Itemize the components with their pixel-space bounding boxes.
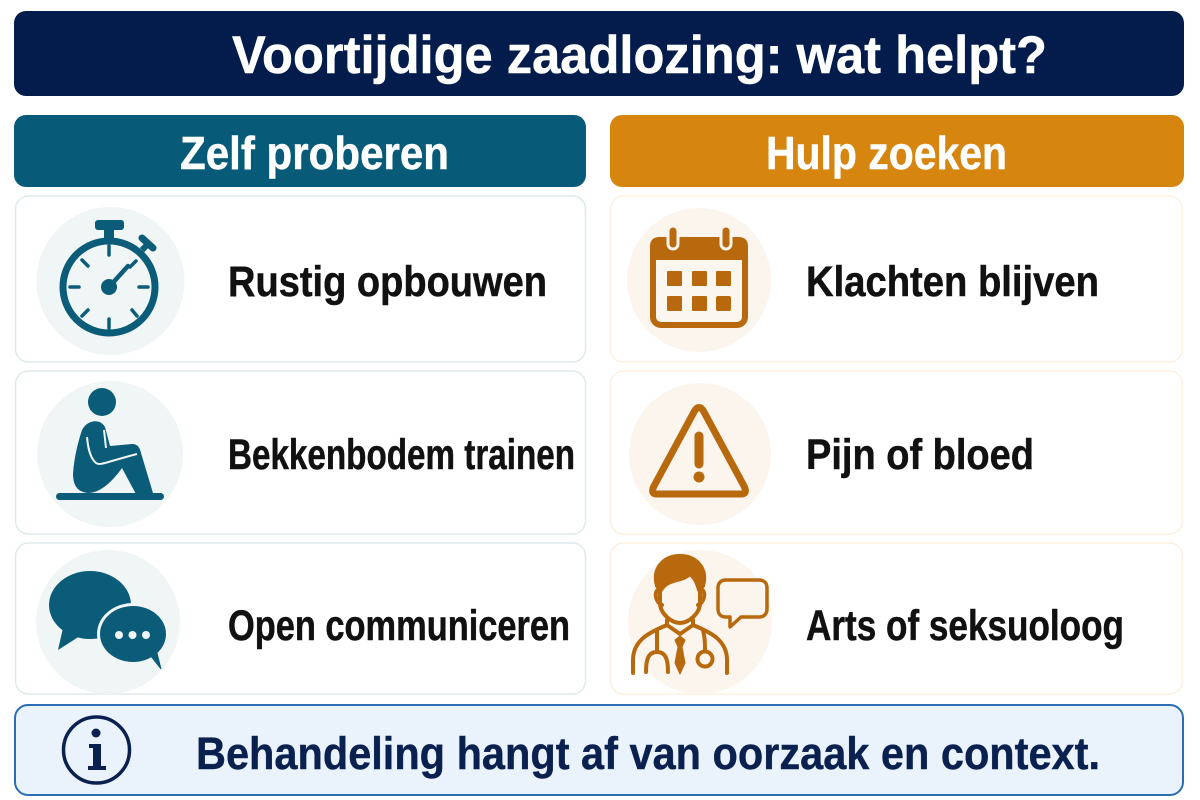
card: arts of seksuoloog bbox=[610, 543, 1182, 694]
label: klachten blijven: Klachten blijven bbox=[806, 258, 1099, 306]
callout: behandeling bbox=[15, 705, 1183, 795]
icon: stopwatch bbox=[63, 220, 155, 333]
icon: warning triangle bbox=[653, 408, 745, 494]
label: pijn of bloed: Pijn of bloed bbox=[806, 431, 1034, 479]
heading: zelf proberen: Zelf proberen bbox=[180, 127, 449, 179]
label: open communiceren: Open communiceren bbox=[228, 602, 570, 650]
icon: speech bubbles bbox=[49, 571, 169, 669]
label: bekkenbodem trainen: Bekkenbodem trainen bbox=[228, 431, 575, 479]
callout text: Behandeling hangt af van oorzaak en context. bbox=[196, 728, 1100, 779]
icon: info bbox=[64, 717, 130, 783]
card: pijn of bloed bbox=[610, 371, 1182, 534]
card: open communiceren bbox=[16, 543, 586, 694]
heading: zelf proberen bbox=[14, 115, 586, 187]
card: bekkenbodem trainen bbox=[16, 371, 586, 534]
icon: doctor with speech bubble bbox=[633, 556, 767, 674]
card: klachten blijven bbox=[610, 196, 1182, 362]
icon: seated person bbox=[56, 388, 164, 500]
panel: zelf proberen bbox=[14, 115, 586, 694]
heading: hulp zoeken bbox=[610, 115, 1184, 187]
label: arts of seksuoloog: Arts of seksuoloog bbox=[806, 602, 1124, 650]
heading: hulp zoeken: Hulp zoeken bbox=[766, 127, 1007, 179]
label: rustig opbouwen: Rustig opbouwen bbox=[228, 258, 547, 306]
card: rustig opbouwen bbox=[16, 196, 586, 362]
title banner: Voortijdige zaadlozing: wat helpt? bbox=[232, 26, 1047, 85]
icon: calendar bbox=[650, 230, 748, 325]
panel: hulp zoeken bbox=[610, 115, 1184, 694]
title banner bbox=[14, 11, 1184, 96]
